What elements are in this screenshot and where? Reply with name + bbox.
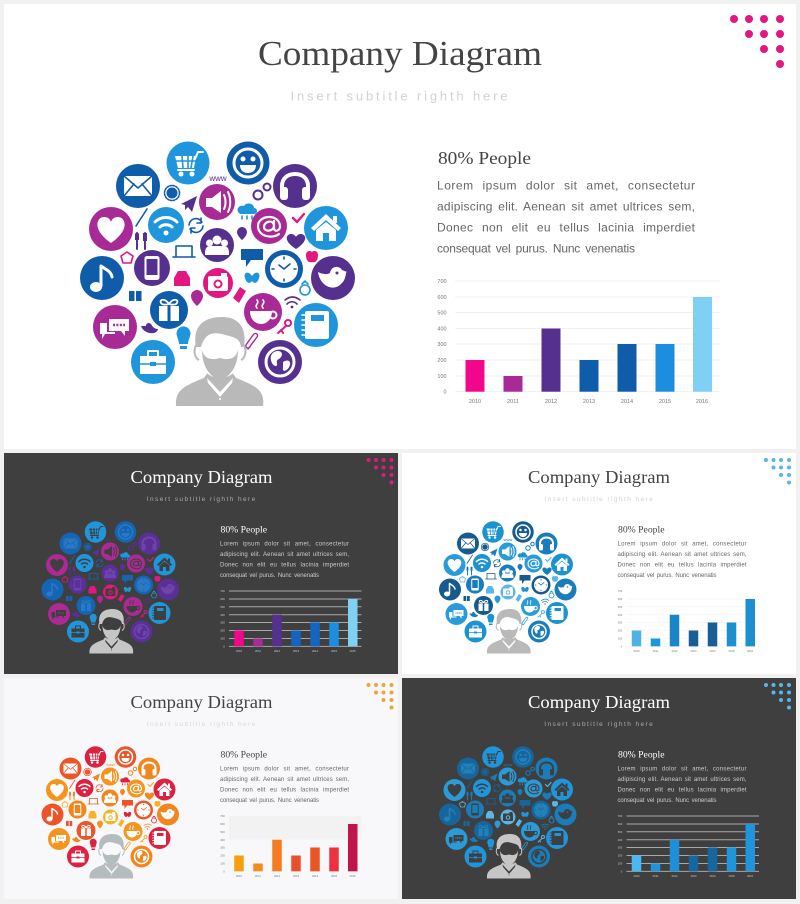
slide contents: Company Diagram — [528, 467, 670, 487]
slide background — [402, 453, 796, 674]
icon: clock — [265, 250, 303, 288]
bar chart: 2010 — [469, 399, 481, 405]
slide contents: 2015 — [728, 874, 735, 878]
panel: main slide white magenta — [4, 4, 796, 449]
slide contents: 80% People — [220, 750, 267, 760]
slide contents: 2013 — [293, 649, 300, 653]
bar chart: 500 — [437, 310, 447, 316]
bar chart: 200 — [437, 358, 447, 364]
slide contents: Insert subtitle righth here — [544, 496, 653, 503]
bar chart: 2013 — [583, 399, 595, 405]
slide contents: Donec non elit eu tellus lacinia imperdiet — [220, 562, 349, 568]
slide contents: 100 — [220, 862, 225, 866]
slide contents: 2014 — [709, 649, 716, 653]
icon cluster with person — [80, 142, 355, 406]
slide contents: 2012 — [671, 649, 678, 653]
icon: wifi — [148, 207, 184, 243]
slide contents: consequat vel purus. Nunc venenatis — [220, 573, 319, 579]
slide contents: Company Diagram — [130, 467, 273, 487]
slide contents: 2015 — [728, 649, 735, 653]
slide contents: 2011 — [653, 874, 659, 878]
icon: chat bubbles — [93, 305, 137, 349]
paragraph: Donec non elit eu tellus lacinia imperdiet — [437, 220, 696, 234]
slide contents: 80% People — [618, 750, 664, 760]
slide contents: 2011 — [255, 649, 261, 653]
slide contents: 400 — [618, 613, 623, 617]
slide contents: Company Diagram — [130, 692, 273, 712]
subtitle: Insert subtitle righth here — [290, 88, 508, 104]
slide contents: 200 — [220, 854, 225, 858]
icon: heart — [89, 207, 133, 251]
slide contents: 2010 — [633, 874, 640, 878]
bar chart: 2016 — [696, 399, 708, 405]
slide contents — [42, 458, 394, 654]
slide background — [4, 453, 398, 674]
slide contents: 500 — [618, 830, 623, 834]
slide contents: 400 — [220, 838, 225, 842]
slide contents: 0 — [223, 644, 225, 648]
icon: coffee cup — [244, 293, 282, 331]
heading: 80% People — [438, 148, 531, 168]
slide contents: 600 — [618, 597, 623, 601]
slide contents: 2014 — [709, 874, 716, 878]
bar chart: 400 — [437, 326, 447, 332]
slide contents: adipiscing elit. Aenean sit amet ultrices sem, — [220, 552, 349, 558]
slide contents: 0 — [223, 869, 225, 873]
slide contents: Insert subtitle righth here — [147, 496, 256, 503]
slide contents: 700 — [618, 589, 623, 593]
slide contents: 200 — [220, 628, 225, 632]
panel: dark slide blue — [402, 678, 796, 899]
person bust — [176, 317, 263, 406]
slide contents: 2015 — [331, 874, 338, 878]
icon: speaker — [199, 184, 235, 220]
icon: briefcase — [131, 340, 175, 384]
slide contents — [439, 458, 791, 654]
icon: music note — [80, 256, 124, 300]
panel: dark slide magenta — [4, 453, 398, 674]
icon: smiley — [226, 142, 270, 184]
icon: globe — [258, 340, 302, 384]
slide contents: 2011 — [653, 649, 659, 653]
slide contents: 600 — [220, 822, 225, 826]
bar chart: 700 — [437, 279, 447, 285]
main slide background — [4, 4, 796, 449]
slide contents: Donec non elit eu tellus lacinia imperdiet — [618, 562, 747, 568]
slide contents: 400 — [618, 838, 623, 842]
slide contents: 2012 — [671, 874, 678, 878]
bar chart: 100 — [437, 374, 447, 380]
slide contents: 2013 — [690, 649, 697, 653]
paragraph — [437, 178, 696, 256]
paragraph: Lorem ipsum dolor sit amet, consectetur — [437, 178, 695, 192]
slide contents: 200 — [618, 854, 623, 858]
panel: white slide blue — [402, 453, 796, 674]
slide contents: 2016 — [747, 649, 754, 653]
slide contents: 0 — [621, 644, 623, 648]
slide contents: 500 — [220, 830, 225, 834]
slide contents: 2013 — [293, 874, 300, 878]
icon: smartphone — [134, 250, 170, 286]
bar chart: 2014 — [621, 399, 633, 405]
title: Company Diagram — [258, 34, 542, 73]
slide contents — [439, 683, 791, 878]
slide contents: adipiscing elit. Aenean sit amet ultrices sem, — [220, 777, 349, 783]
slide contents: consequat vel purus. Nunc venenatis — [220, 798, 319, 804]
slide contents: Donec non elit eu tellus lacinia imperdiet — [618, 787, 747, 793]
slide contents: consequat vel purus. Nunc venenatis — [618, 798, 716, 804]
icon: gift — [150, 291, 188, 329]
slide contents: 2010 — [633, 649, 640, 653]
slide contents: 2010 — [236, 874, 243, 878]
bar chart: 2015 — [659, 399, 671, 405]
slide background — [402, 678, 796, 899]
slide contents: 2010 — [236, 649, 243, 653]
slide contents: 200 — [618, 628, 623, 632]
icon: camera — [203, 268, 233, 298]
slide contents: 2012 — [274, 649, 281, 653]
icon: at sign — [251, 208, 287, 244]
slide contents: 700 — [220, 814, 225, 818]
slide contents: Lorem ipsum dolor sit amet, consectetur — [220, 766, 349, 772]
dot pattern — [730, 15, 784, 68]
slide contents: 2016 — [349, 874, 356, 878]
icon: home — [304, 206, 348, 250]
slide contents: 2016 — [349, 649, 356, 653]
bar chart — [437, 279, 720, 405]
slide contents: adipiscing elit. Aenean sit amet ultrices sem, — [618, 777, 747, 783]
slide contents: 700 — [618, 814, 623, 818]
slide contents: Lorem ipsum dolor sit amet, consectetur — [220, 541, 349, 547]
slide contents: 0 — [621, 869, 623, 873]
slide contents: 100 — [618, 862, 623, 866]
slide contents: 700 — [220, 589, 225, 593]
slide contents: 2014 — [312, 649, 319, 653]
slide contents: 80% People — [220, 524, 267, 534]
slide contents: 300 — [220, 846, 225, 850]
slide contents: 100 — [618, 636, 623, 640]
slide contents: 2016 — [747, 874, 754, 878]
icon: bird — [311, 256, 355, 300]
panel: light slide orange — [4, 678, 398, 899]
slide contents: Lorem ipsum dolor sit amet, consectetur — [618, 541, 746, 547]
slide contents: Insert subtitle righth here — [147, 721, 256, 728]
small icons — [121, 184, 318, 349]
slide contents: 300 — [618, 620, 623, 624]
slide contents: 2012 — [274, 874, 281, 878]
slide contents — [42, 683, 394, 878]
icon: headphones — [273, 164, 317, 208]
slide contents: 500 — [618, 605, 623, 609]
slide contents: 2011 — [255, 874, 261, 878]
bar chart: 300 — [437, 342, 447, 348]
slide contents: 500 — [220, 605, 225, 609]
slide contents: 2014 — [312, 874, 319, 878]
bar chart: 600 — [437, 295, 447, 301]
slide contents: 80% People — [618, 524, 664, 534]
slide background — [4, 678, 398, 899]
paragraph: consequat vel purus. Nunc venenatis — [437, 242, 635, 256]
icon: shopping cart — [166, 142, 210, 184]
paragraph: adipiscing elit. Aenean sit amet ultrices sem, — [437, 200, 695, 214]
slide contents: consequat vel purus. Nunc venenatis — [618, 573, 716, 579]
slide contents: 300 — [618, 846, 623, 850]
slide contents: Insert subtitle righth here — [544, 721, 653, 728]
slide contents: 600 — [618, 822, 623, 826]
slide contents: Lorem ipsum dolor sit amet, consectetur — [618, 766, 746, 772]
slide contents: 600 — [220, 597, 225, 601]
icon: mail — [116, 164, 160, 208]
slide contents: Company Diagram — [528, 692, 670, 712]
small icon: www: www — [208, 174, 227, 183]
slide contents: 2013 — [690, 874, 697, 878]
icon: notebook — [294, 303, 338, 347]
slide contents: 300 — [220, 620, 225, 624]
slide contents: adipiscing elit. Aenean sit amet ultrices sem, — [618, 552, 747, 558]
bar chart: 2011 — [507, 399, 519, 405]
slide contents: Donec non elit eu tellus lacinia imperdiet — [220, 787, 349, 793]
slide contents: 100 — [220, 636, 225, 640]
icon: people — [200, 228, 234, 262]
slide contents: 400 — [220, 613, 225, 617]
bar chart: 0 — [443, 390, 447, 396]
bar chart: 2012 — [545, 399, 557, 405]
slide contents: 2015 — [331, 649, 338, 653]
